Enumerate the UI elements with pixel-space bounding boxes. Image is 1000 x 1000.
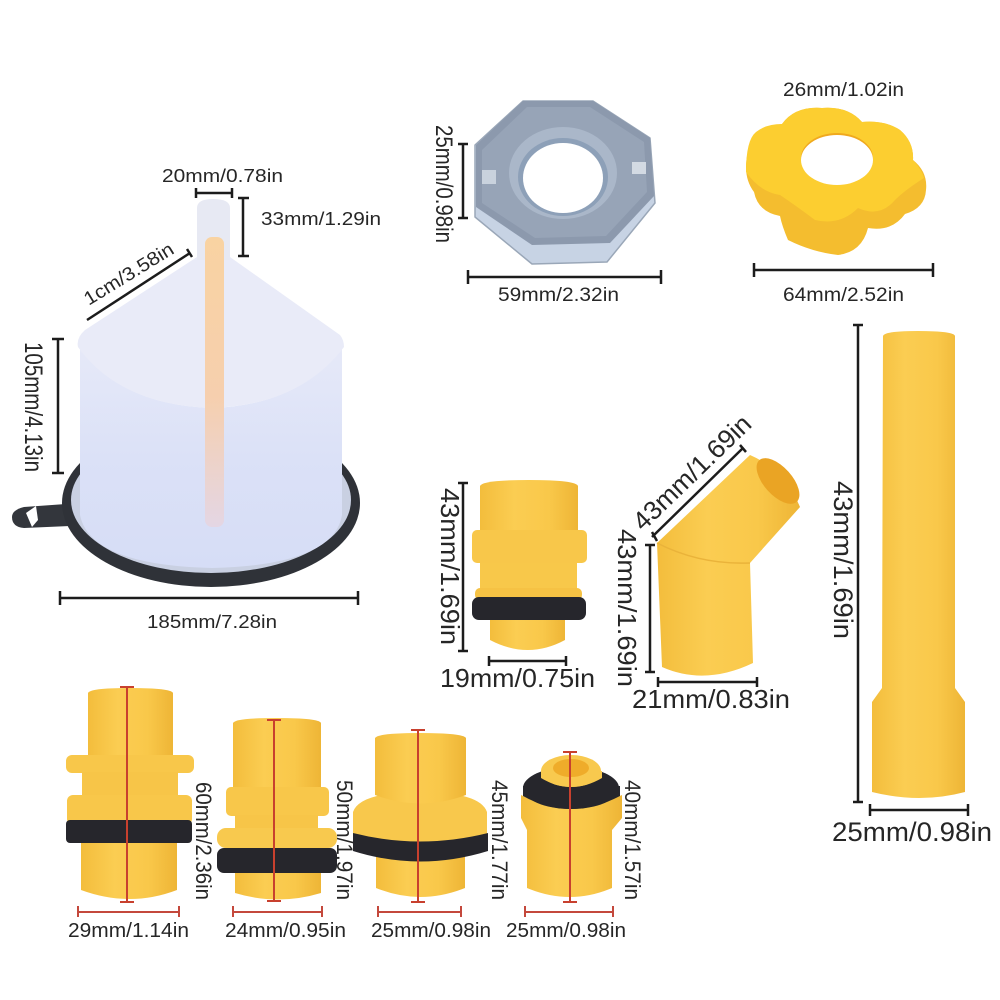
knob dimension line	[754, 263, 933, 277]
funnel product	[12, 199, 360, 587]
adapter 2 width line	[233, 906, 322, 917]
label: small adapter height: 43mm/1.69in	[435, 488, 465, 645]
label: adapter 4 width: 25mm/0.98in	[506, 920, 626, 942]
label: adapter 2 width: 24mm/0.95in	[225, 920, 346, 942]
icon: long straight spout	[872, 331, 965, 798]
label: adapter 3 width: 25mm/0.98in	[371, 920, 491, 942]
nut dimension lines	[458, 144, 661, 284]
label: funnel height: 105mm/4.13in	[19, 342, 47, 472]
label: funnel diameter: 185mm/7.28in	[147, 611, 277, 632]
adapter 4 width line	[525, 906, 613, 917]
label: adapter 1 height: 60mm/2.36in	[191, 782, 216, 900]
label: nut width: 59mm/2.32in	[498, 285, 619, 306]
label: long spout width: 25mm/0.98in	[832, 817, 992, 847]
icon: adapter 4	[521, 752, 622, 902]
label: angled spout width: 21mm/0.83in	[632, 684, 790, 714]
mask: hidden start of cone label	[60, 285, 92, 321]
long spout dimension lines	[853, 325, 968, 816]
icon: adapter 3	[353, 730, 488, 902]
icon: black ring with tab	[12, 419, 360, 587]
label: angled spout length: 43mm/1.69in	[626, 408, 757, 536]
label: long spout height: 43mm/1.69in	[828, 481, 858, 639]
label: adapter 1 width: 29mm/1.14in	[68, 920, 189, 942]
icon: adapter 1	[66, 687, 194, 902]
adapter 3 width line	[378, 906, 461, 917]
icon: yellow knob cap	[746, 108, 926, 255]
angled spout dimension lines	[645, 445, 757, 687]
label: funnel spout width: 20mm/0.78in	[162, 165, 283, 186]
icon: funnel body	[78, 199, 344, 568]
label: angled spout height: 43mm/1.69in	[612, 529, 642, 687]
label: funnel spout height: 33mm/1.29in	[261, 208, 381, 229]
label: adapter 2 height: 50mm/1.97in	[332, 780, 357, 900]
label: adapter 4 height: 40mm/1.57in	[620, 780, 645, 900]
label: nut height: 25mm/0.98in	[430, 125, 457, 243]
label: knob thickness: 26mm/1.02in	[783, 80, 904, 101]
label: adapter 3 height: 45mm/1.77in	[487, 780, 512, 900]
funnel dimension lines	[52, 188, 358, 605]
adapter 1 width line	[78, 906, 179, 917]
icon: adapter 2	[217, 718, 337, 901]
label: small adapter width: 19mm/0.75in	[440, 663, 595, 693]
icon: angled spout	[657, 451, 807, 676]
icon: small adapter with black ring	[472, 480, 587, 650]
label: knob width: 64mm/2.52in	[783, 285, 904, 306]
small adapter dimension lines	[458, 483, 566, 666]
icon: metal octagon nut	[475, 101, 655, 264]
label: funnel cone length: 9.1cm/3.58in	[66, 239, 178, 319]
